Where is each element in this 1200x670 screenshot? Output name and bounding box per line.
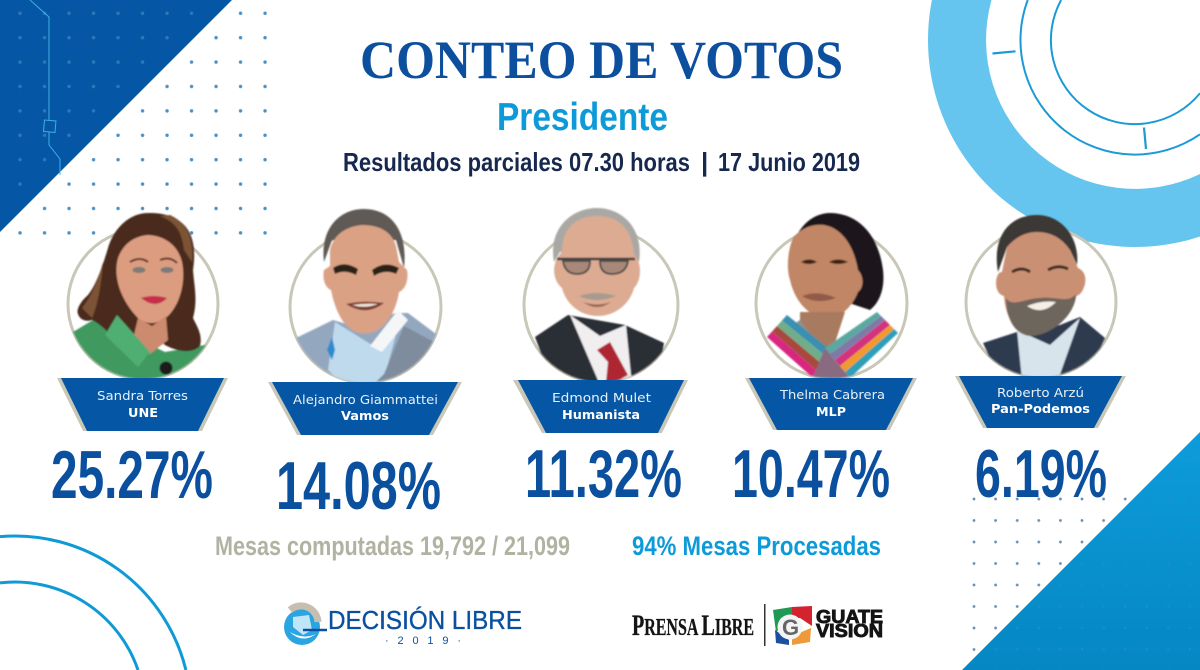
logo: Decisión Libre — [284, 605, 522, 647]
portrait ring — [68, 229, 218, 379]
candidate: Thelma Cabrera — [732, 213, 917, 512]
name ribbon: Thelma Cabrera — [779, 387, 885, 402]
date line: | — [701, 147, 708, 177]
name ribbon — [57, 378, 228, 431]
name ribbon: Humanista — [562, 407, 640, 422]
subtitle: Presidente: Presidente — [497, 96, 668, 139]
thick ring top right — [928, 0, 1200, 247]
name ribbon: Edmond Mulet — [552, 390, 651, 405]
icon: G cube: G — [782, 615, 799, 640]
background: dot grid top left — [8, 0, 278, 246]
logo: Guatevisión: GUATE — [816, 607, 883, 627]
candidate: Alejandro Giammattei — [268, 209, 462, 524]
logo: Guatevisión: VISION — [816, 621, 883, 641]
name ribbon: UNE — [128, 405, 158, 420]
portrait ring — [966, 227, 1116, 377]
name ribbon — [513, 380, 688, 433]
dot grid bottom right — [964, 489, 1136, 661]
logo: Decisión Libre: DECISIÓN LIBRE — [328, 605, 522, 635]
polling stations percentage: 94% Mesas Procesadas — [632, 531, 881, 561]
percentage: 14.08% — [276, 448, 441, 524]
logo: Guatevisión — [773, 606, 883, 645]
logo: Decisión Libre: · 2 0 1 9 · — [385, 635, 461, 647]
name ribbon — [745, 378, 917, 430]
logo: Prensa Libre: PRENSA LIBRE — [632, 609, 754, 642]
portrait: Sandra Torres — [72, 212, 206, 378]
date line: 17 Junio 2019 — [718, 147, 860, 177]
background: blue triangle top left — [0, 0, 232, 232]
title: CONTEO DE VOTOS — [360, 30, 843, 90]
name ribbon: Alejandro Giammattei — [293, 392, 438, 407]
name ribbon: Pan-Podemos — [991, 401, 1090, 416]
percentage: 25.27% — [51, 437, 213, 513]
icon: globe mark — [284, 606, 327, 645]
portrait: Roberto Arzú — [983, 215, 1105, 380]
polling stations counted: Mesas computadas 19,792 / 21,099 — [215, 531, 570, 561]
percentage: 10.47% — [732, 436, 890, 512]
circuit line decoration — [30, 0, 60, 175]
portrait: Alejandro Giammattei — [296, 209, 440, 392]
concentric arcs bottom left — [0, 536, 186, 670]
name ribbon: Roberto Arzú — [997, 385, 1084, 400]
candidate: Edmond Mulet — [513, 208, 688, 512]
percentage: 11.32% — [525, 436, 682, 512]
percentage: 6.19% — [975, 436, 1107, 512]
name ribbon: Sandra Torres — [97, 388, 188, 403]
name ribbon: MLP — [816, 404, 846, 419]
candidate: Sandra Torres — [51, 213, 228, 513]
blue triangle bottom right — [962, 432, 1200, 670]
date line: Resultados parciales 07.30 horas — [343, 147, 690, 177]
portrait: Edmond Mulet — [535, 208, 664, 390]
candidate: Roberto Arzú — [955, 215, 1126, 512]
name ribbon — [268, 382, 462, 435]
portrait ring — [290, 232, 441, 382]
portrait ring — [756, 228, 907, 378]
portrait: Thelma Cabrera — [767, 213, 898, 384]
name ribbon — [955, 376, 1126, 428]
portrait ring — [524, 228, 678, 382]
divider — [764, 604, 766, 646]
name ribbon: Vamos — [341, 408, 389, 423]
thin rings and ticks top right — [992, 0, 1200, 155]
